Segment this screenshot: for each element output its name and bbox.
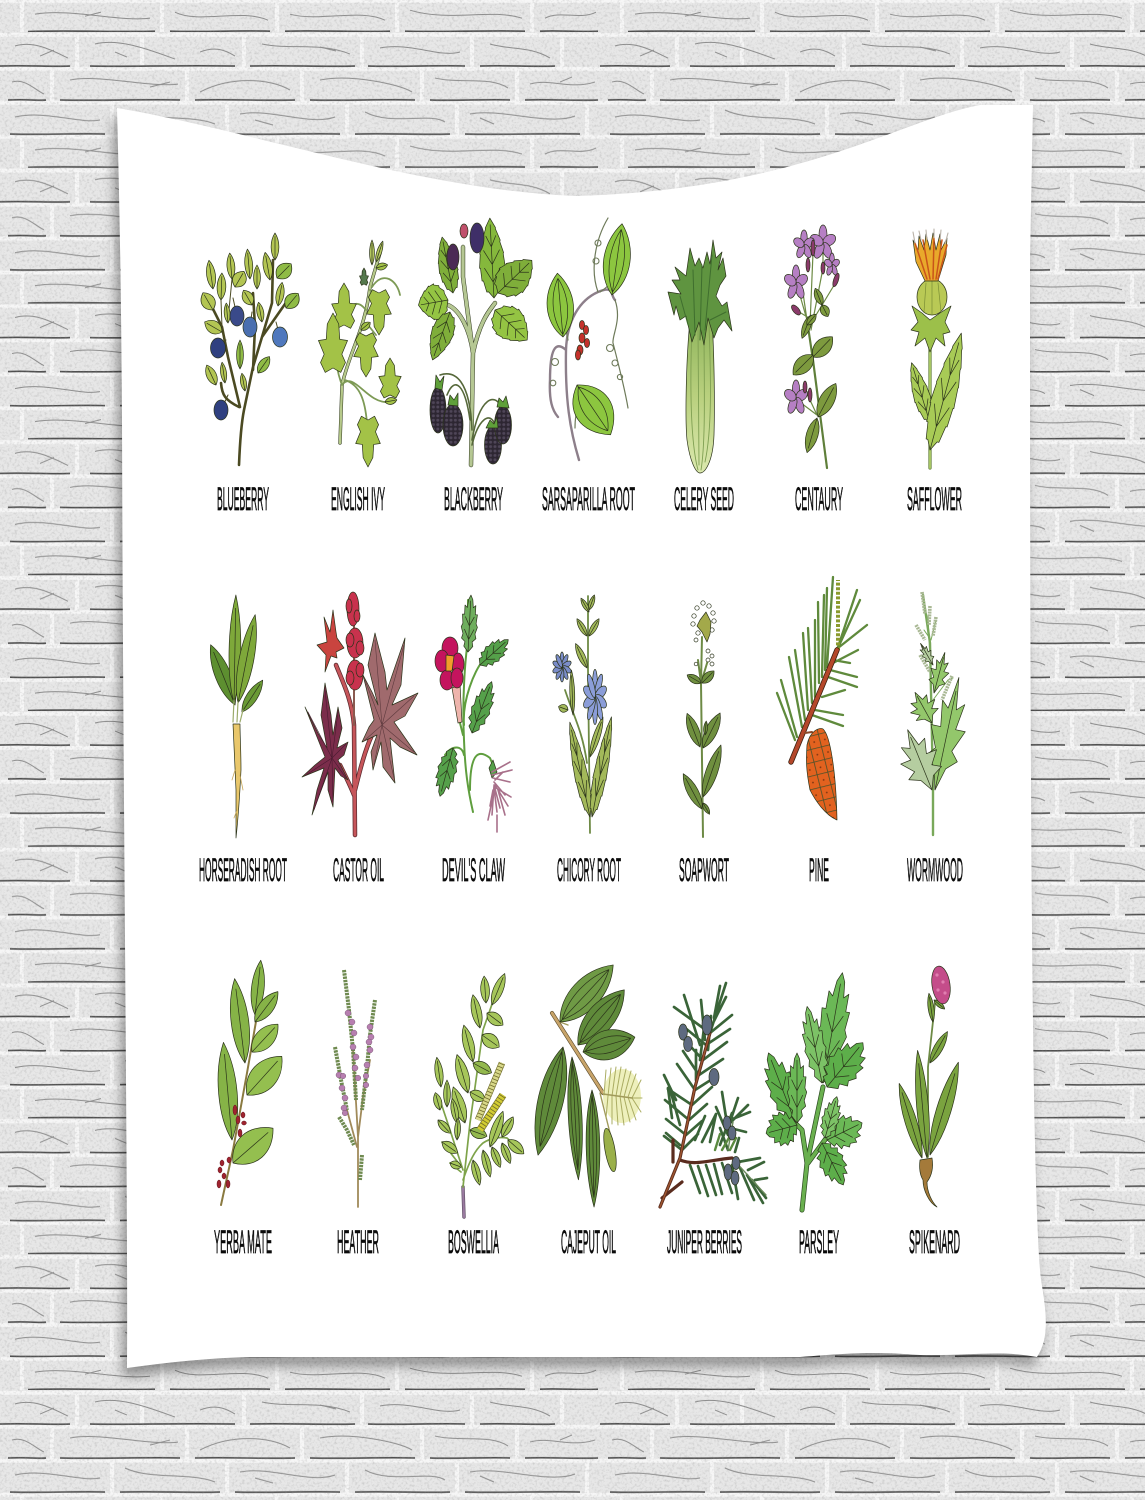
illustration: boswellia xyxy=(432,972,527,1217)
illustration: wormwood xyxy=(890,592,976,835)
text: CELERY SEED xyxy=(674,481,734,517)
plant: juniper berries xyxy=(660,983,767,1260)
illustration: castor oil xyxy=(302,592,418,835)
plant: castor oil xyxy=(302,592,418,888)
plant: safflower xyxy=(904,229,973,517)
illustration: soapwort xyxy=(678,601,726,837)
illustration: celery seed xyxy=(668,240,732,473)
illustration: horseradish root xyxy=(203,595,267,838)
plant: blackberry xyxy=(415,217,543,517)
text: CASTOR OIL xyxy=(333,852,384,888)
plant: devil's claw xyxy=(431,595,515,888)
plant: heather xyxy=(335,970,379,1260)
tapestry panel xyxy=(117,105,1046,1368)
plant: boswellia xyxy=(432,972,527,1260)
tapestry shadow xyxy=(113,114,1042,1377)
illustration: chicory root xyxy=(552,594,618,833)
illustration: parsley xyxy=(755,970,876,1210)
text: SOAPWORT xyxy=(679,852,729,888)
illustration: spikenard xyxy=(894,965,965,1207)
plant: horseradish root xyxy=(199,595,287,888)
plant: celery seed xyxy=(668,240,734,517)
plant: parsley: PARSLEY xyxy=(799,1224,839,1260)
plant: yerba mate xyxy=(214,960,292,1260)
text: DEVIL'S CLAW xyxy=(442,852,505,888)
plant: pine xyxy=(777,577,867,888)
text: BLUEBERRY xyxy=(217,481,269,517)
plant: sarsaparilla root xyxy=(542,218,635,517)
text: HEATHER xyxy=(337,1224,379,1260)
plant: pine: PINE xyxy=(809,852,829,888)
text: ENGLISH IVY xyxy=(331,481,385,517)
illustration: english ivy xyxy=(318,240,401,467)
text: CHICORY ROOT xyxy=(557,852,621,888)
text: BLACKBERRY xyxy=(444,481,503,517)
illustration: safflower xyxy=(904,229,973,468)
illustration: sarsaparilla root xyxy=(544,218,635,460)
plant: blueberry xyxy=(197,233,303,517)
text: CENTAURY xyxy=(795,481,843,517)
plant: chicory root xyxy=(552,594,621,888)
illustration: devil's claw xyxy=(431,595,515,832)
illustration: centaury xyxy=(783,225,842,468)
illustration: cajeput oil xyxy=(526,955,642,1207)
plant: wormwood xyxy=(890,592,976,888)
text: SPIKENARD xyxy=(909,1224,960,1260)
illustration: juniper berries xyxy=(660,983,767,1207)
text: SAFFLOWER xyxy=(907,481,962,517)
plant: cajeput oil xyxy=(526,955,642,1260)
illustration: pine xyxy=(777,577,867,820)
plant: english ivy xyxy=(318,240,401,517)
text: WORMWOOD xyxy=(907,852,963,888)
plant: parsley xyxy=(755,970,876,1260)
text: BOSWELLIA xyxy=(448,1224,499,1260)
text: HORSERADISH ROOT xyxy=(199,852,287,888)
text: SARSAPARILLA ROOT xyxy=(542,481,635,517)
plant: spikenard xyxy=(894,965,965,1260)
text: CAJEPUT OIL xyxy=(561,1224,616,1260)
text: YERBA MATE xyxy=(214,1224,272,1260)
illustration: blackberry xyxy=(415,217,543,465)
plant: centaury xyxy=(783,225,843,517)
illustration: heather xyxy=(335,970,375,1207)
illustration: blueberry xyxy=(197,233,303,465)
illustration: yerba mate xyxy=(214,960,292,1205)
plant: soapwort xyxy=(678,601,729,888)
text: JUNIPER BERRIES xyxy=(667,1224,742,1260)
